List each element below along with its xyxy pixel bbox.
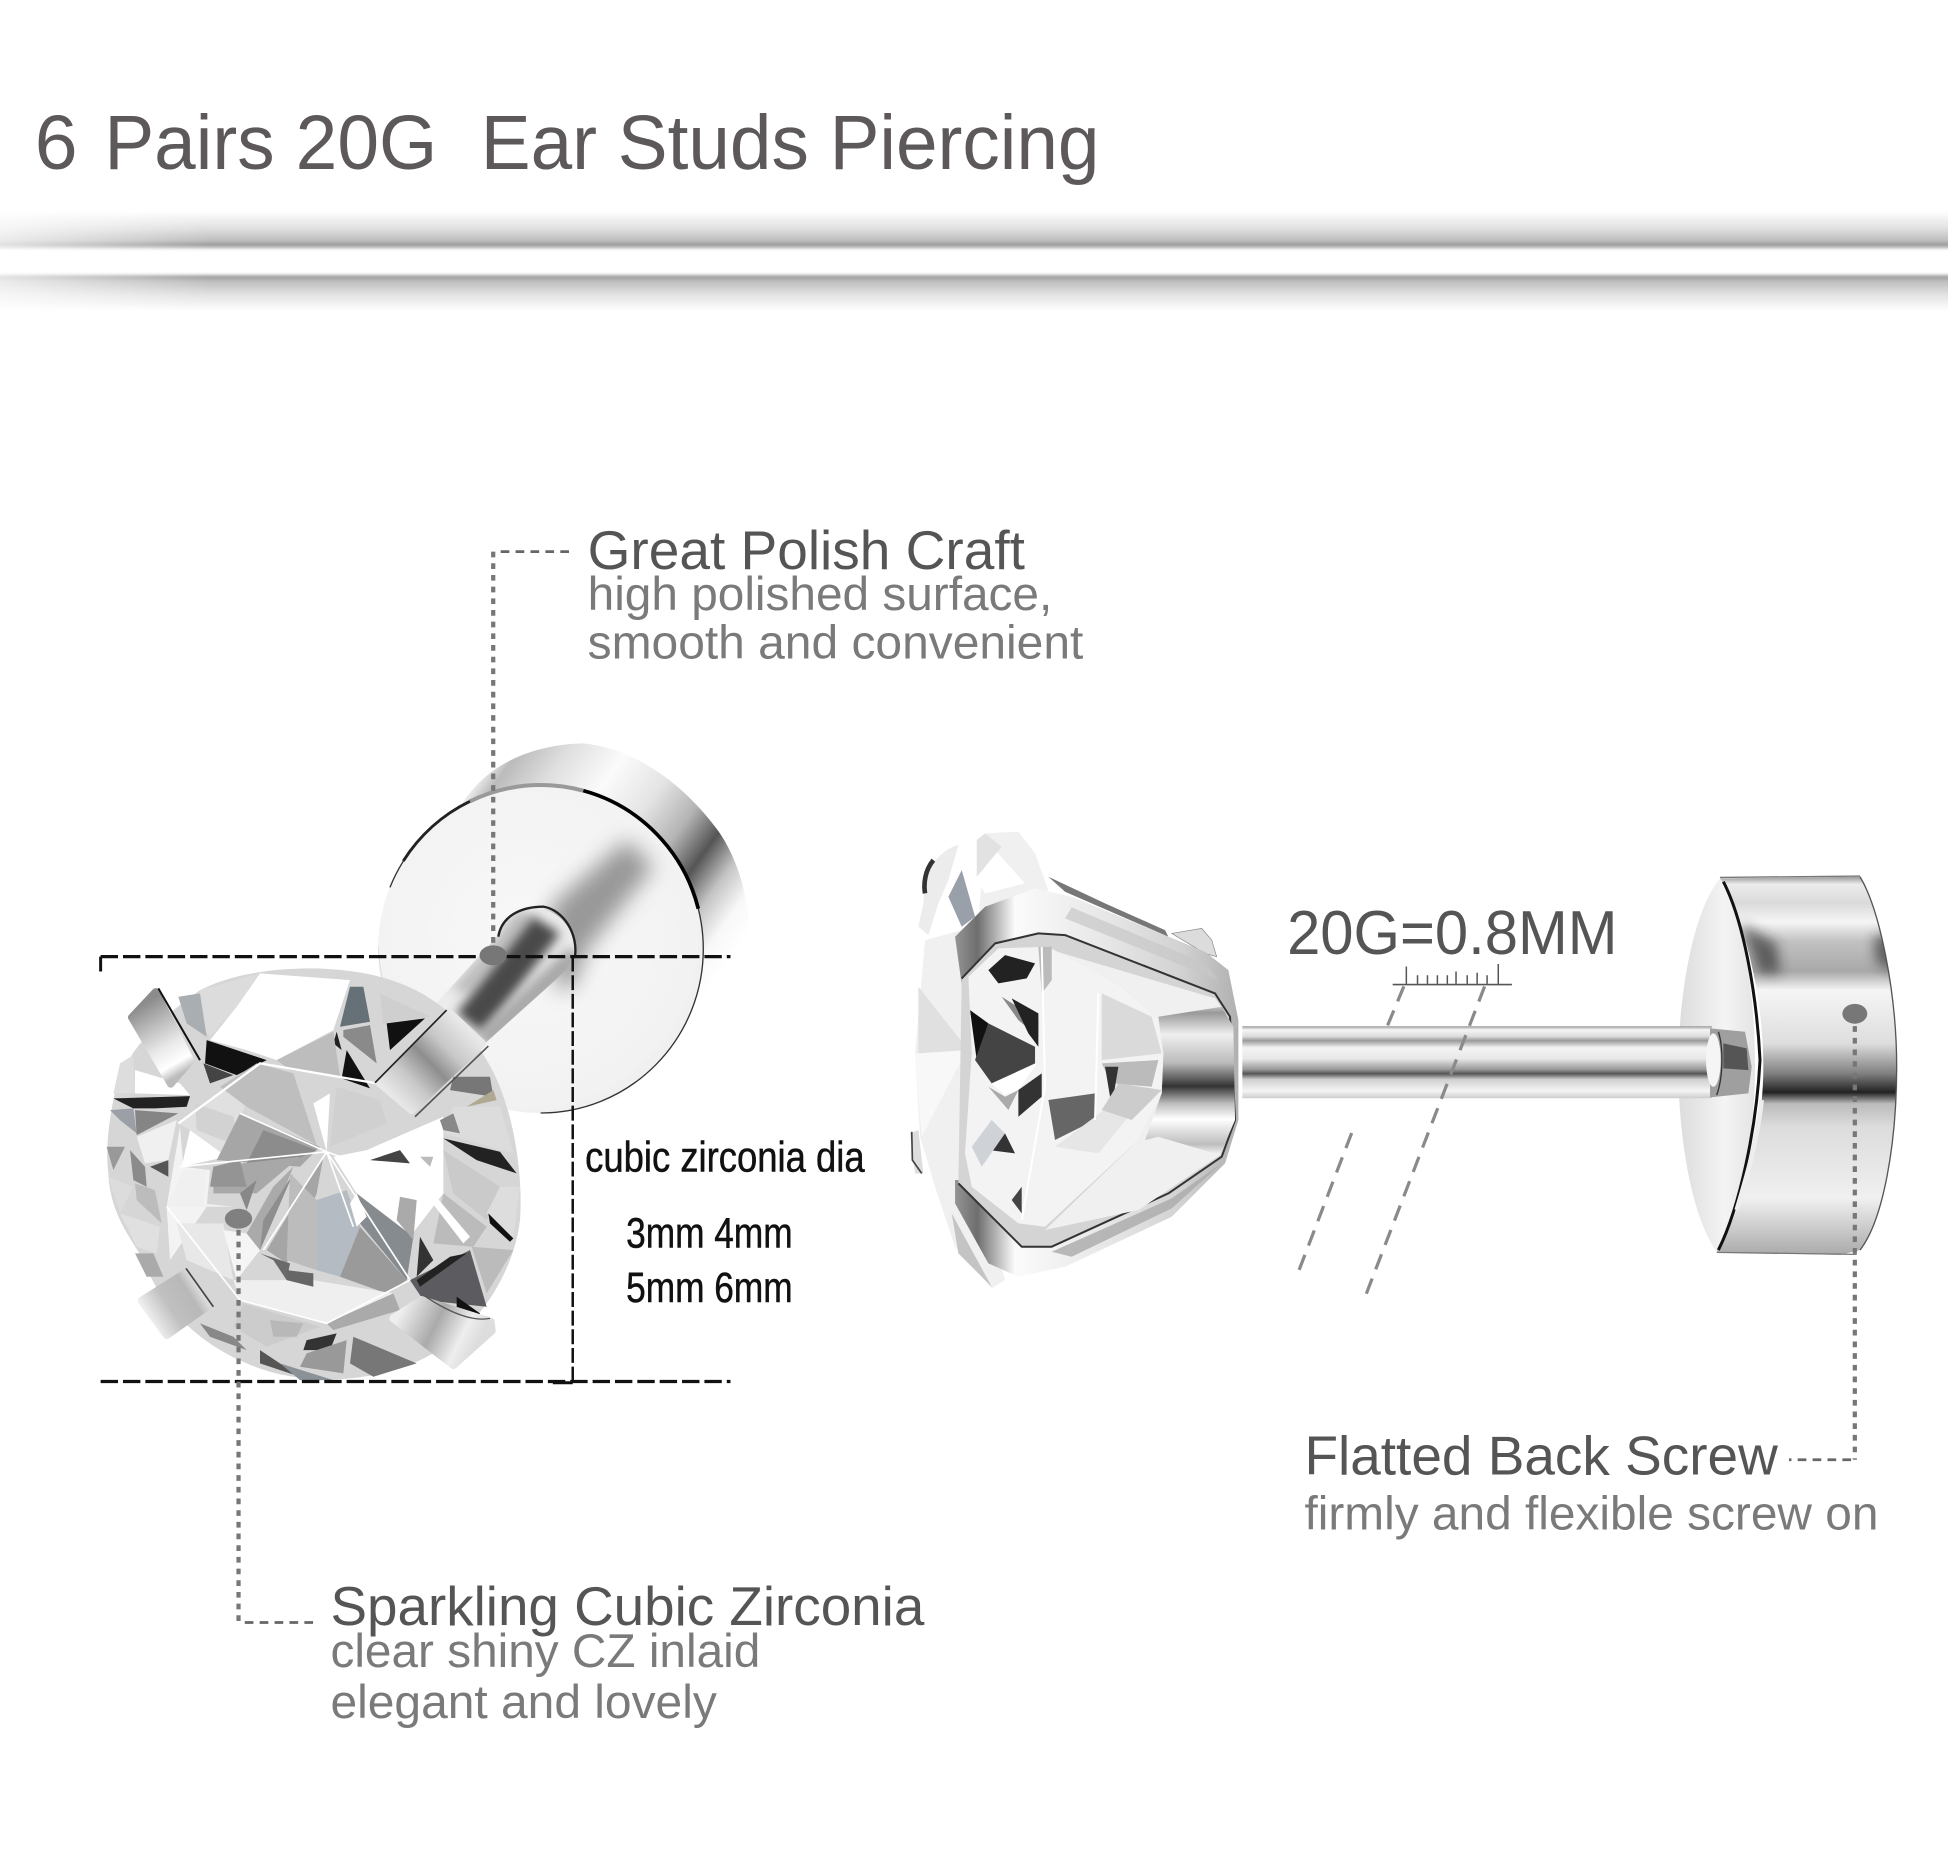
side view stud [910, 832, 1902, 1288]
callout dot: polish [480, 945, 507, 965]
callout: sparkling cubic zirconia: elegant and lovely [330, 1676, 717, 1729]
header double rule [0, 205, 1948, 317]
callout text: polish: high polished surface, [588, 568, 1052, 621]
callout heading: screw: Flatted Back Screw [1304, 1426, 1778, 1487]
callout: great polish craft: smooth and convenient [588, 616, 1083, 669]
callout: great polish craft [480, 520, 1083, 965]
rear prong [1048, 877, 1168, 937]
inner cup polished wall [1145, 1007, 1235, 1155]
callout heading: polish: Great Polish Craft [588, 520, 1025, 581]
disc edge band [457, 743, 748, 1103]
thickness dashed guides [1298, 986, 1485, 1299]
size label: 5mm 6mm [626, 1264, 793, 1311]
leader line: polish [498, 551, 569, 553]
window gem [965, 947, 1163, 1227]
callout heading: gem: Sparkling Cubic Zirconia [330, 1576, 925, 1637]
post [438, 909, 574, 1042]
flat back face [1678, 878, 1755, 1252]
dimension lines [101, 957, 731, 1383]
gem and setting side view [910, 832, 1238, 1288]
callout dot: screw [1842, 1004, 1867, 1024]
prong: top right [380, 1013, 482, 1110]
callout text: screw: firmly and flexible screw on [1304, 1487, 1878, 1540]
title: 20G [296, 100, 437, 186]
title: Ear Studs Piercing [481, 100, 1099, 186]
callout text: gem: clear shiny CZ inlaid [330, 1625, 760, 1678]
callout dot: gem [225, 1209, 252, 1229]
flat back band [1717, 877, 1897, 1255]
prong: top left [132, 992, 191, 1084]
top left prong [918, 845, 958, 935]
cubic zirconia gem front [107, 968, 521, 1380]
bottom left prong [910, 1130, 923, 1173]
title: Pairs [104, 100, 275, 186]
collar [1706, 1028, 1752, 1097]
size label: cubic zirconia dia [585, 1134, 865, 1181]
setting cup [955, 888, 1238, 1277]
flat back disc [1678, 876, 1902, 1255]
gauge label: 20G=0.8MM [1287, 899, 1618, 968]
prong: bottom left [142, 1273, 207, 1335]
title: 6 [35, 100, 78, 186]
callout: sparkling cubic zirconia [225, 1209, 925, 1729]
ruler [1393, 964, 1512, 985]
rear gem body [915, 832, 1048, 1288]
post shadow on disc [550, 840, 653, 990]
front view stud back disc and post [378, 743, 748, 1113]
post side view [1242, 1026, 1712, 1098]
disc rim [390, 785, 703, 1113]
callout: flatted back screw [1304, 1004, 1878, 1540]
size label: 3mm 4mm [626, 1209, 793, 1256]
size label [585, 1134, 865, 1311]
disc face [378, 785, 703, 1113]
leader line: gem [237, 1230, 240, 1623]
leader line: screw [1853, 1026, 1857, 1460]
prong: bottom right [393, 1300, 492, 1365]
